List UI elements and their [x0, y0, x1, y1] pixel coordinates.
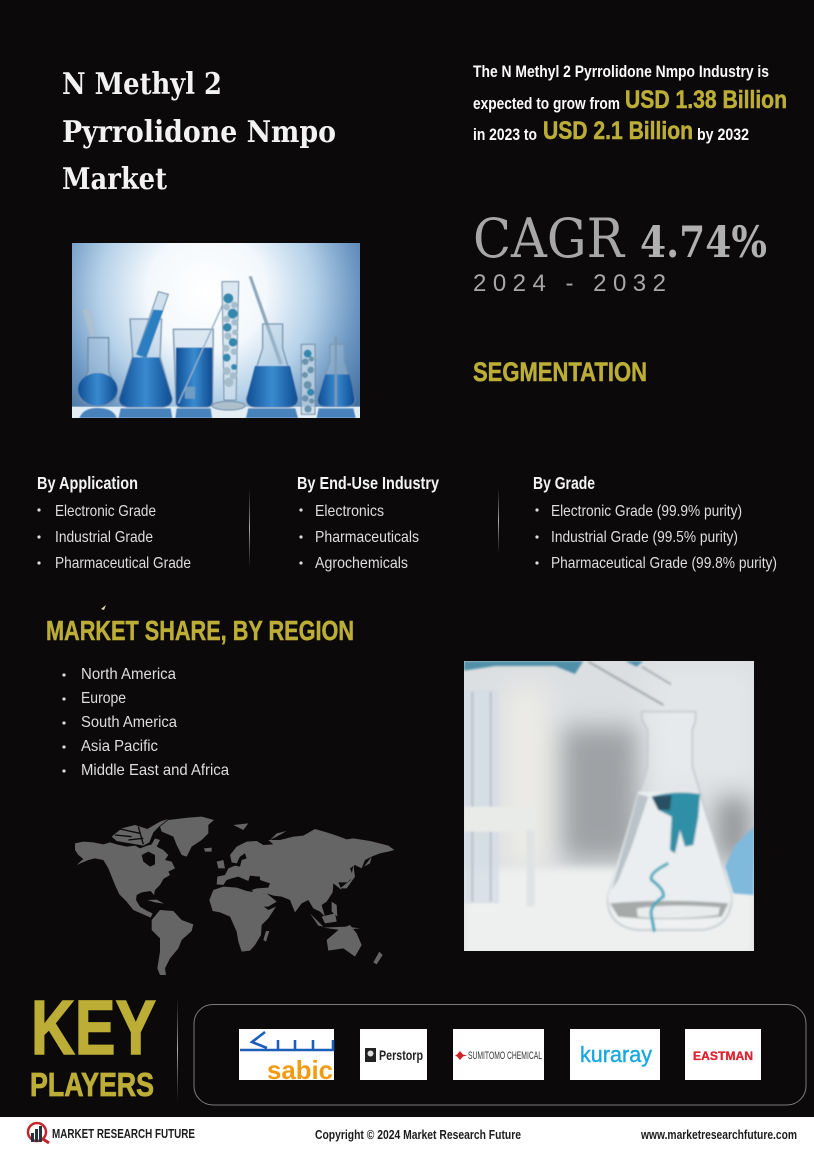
text block: market growth summary: expected to grow from: [473, 95, 620, 113]
CAGR figure: CAGR: [473, 207, 625, 270]
title: N Methyl 2: [62, 67, 222, 102]
CAGR figure: 2024 - 2032: [473, 270, 666, 297]
region list: Europe: [81, 690, 126, 707]
logo: Eastman: [685, 1029, 761, 1080]
segment list: by end-use industry: Electronics: [315, 503, 384, 520]
key players heading: PLAYERS: [30, 1066, 154, 1103]
logo: Perstorp: [360, 1029, 427, 1080]
segment list: by application: Industrial Grade: [55, 529, 153, 546]
logo: SABIC: [239, 1029, 334, 1085]
segment list: by grade: Pharmaceutical Grade (99.8% purity): [551, 555, 777, 572]
segment list: by grade: Electronic Grade (99.9% purity): [551, 503, 742, 520]
CAGR figure: [473, 207, 767, 297]
segment list: by grade: By Grade: [533, 473, 595, 493]
region list: Asia Pacific: [81, 738, 158, 755]
region list: Middle East and Africa: [81, 762, 229, 779]
segment list: by end-use industry: By End-Use Industry: [297, 473, 439, 493]
segment list: by application: Pharmaceutical Grade: [55, 555, 191, 572]
region list: South America: [81, 714, 177, 731]
region list: [62, 666, 229, 779]
image: flask with blue dye: [464, 661, 755, 955]
CAGR figure: 4.74%: [640, 218, 767, 268]
segment list: by application: [37, 473, 191, 572]
heading: market share by region: MARKET SHARE, BY REGION: [46, 615, 354, 646]
flask: [608, 712, 732, 932]
text block: market growth summary: [473, 63, 787, 145]
logo: Kuraray: kuraray: [580, 1042, 652, 1067]
footer: Copyright © 2024 Market Research Future: [315, 1127, 521, 1142]
segment list: by application: Electronic Grade: [55, 503, 156, 520]
logo: Perstorp: Perstorp: [379, 1047, 423, 1063]
segment list: by grade: Industrial Grade (99.5% purity): [551, 529, 738, 546]
world map: [75, 817, 394, 975]
segment list: by end-use industry: Agrochemicals: [315, 555, 408, 572]
region list: North America: [81, 666, 176, 683]
footer: MARKET RESEARCH FUTURE: [52, 1126, 195, 1141]
segment list: by end-use industry: [297, 473, 439, 572]
logo: Sumitomo Chemical: [453, 1029, 544, 1080]
heading: segmentation: SEGMENTATION: [473, 357, 647, 387]
segment list: by grade: [533, 473, 777, 572]
logo: Sumitomo Chemical: SUMITOMO CHEMICAL: [468, 1050, 542, 1062]
logo: Kuraray: [570, 1029, 660, 1080]
test tube rack: [464, 690, 536, 907]
text block: market growth summary: USD 2.1 Billion: [543, 117, 693, 145]
logo: SABIC: sabic: [267, 1055, 333, 1085]
key players heading: [30, 985, 156, 1103]
heading: market share by region: [46, 605, 354, 646]
logo: Eastman: EASTMAN: [693, 1051, 753, 1063]
text block: market growth summary: USD 1.38 Billion: [625, 86, 787, 114]
segment list: by end-use industry: Pharmaceuticals: [315, 529, 419, 546]
title: [62, 67, 336, 197]
gloved hand top: [464, 661, 754, 895]
gloved hand right: [725, 827, 754, 895]
title: Pyrrolidone Nmpo: [62, 115, 336, 150]
text block: market growth summary: by 2032: [697, 126, 749, 144]
text block: market growth summary: in 2023 to: [473, 126, 537, 144]
key players heading: KEY: [31, 985, 156, 1071]
reflections: [79, 408, 356, 418]
key players panel: [194, 1004, 806, 1105]
image: laboratory glassware with blue liquid: [72, 243, 360, 418]
footer logo: [28, 1123, 49, 1143]
title: Market: [62, 162, 167, 197]
segment list: by application: By Application: [37, 473, 138, 493]
flask pipette: [83, 308, 95, 337]
footer: [0, 1117, 814, 1150]
